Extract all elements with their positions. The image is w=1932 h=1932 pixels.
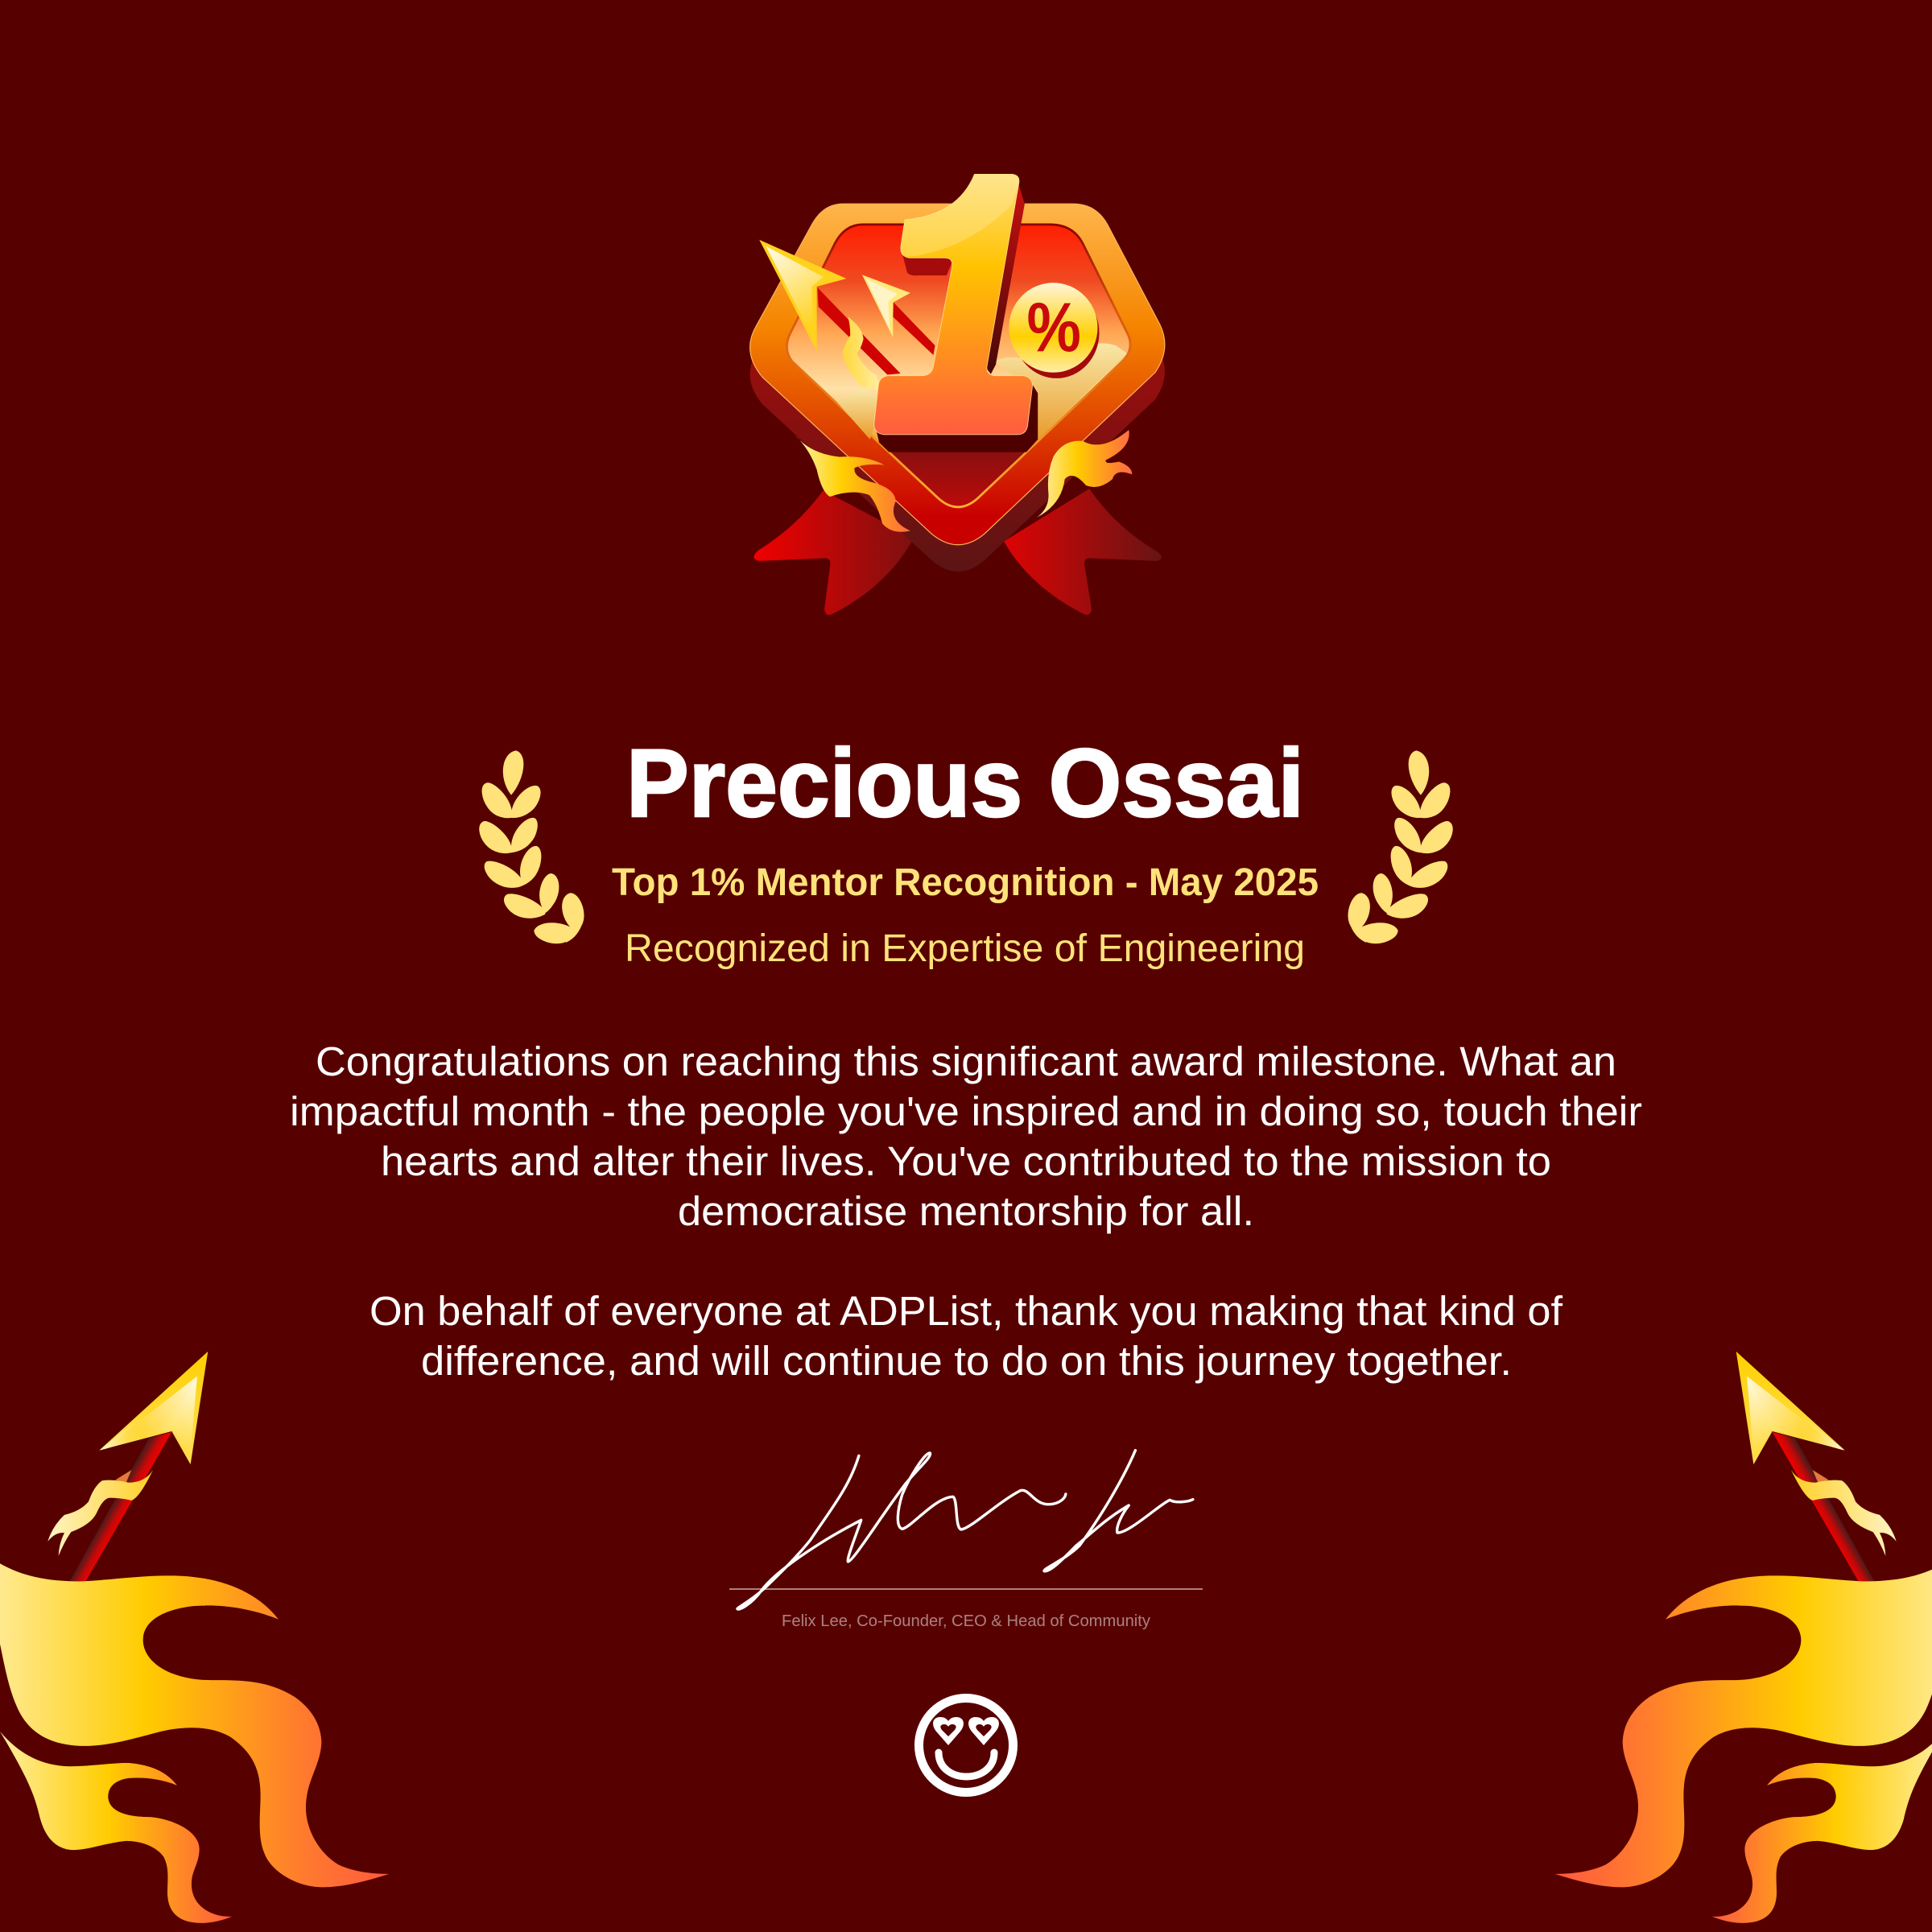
flame right <box>1037 430 1132 518</box>
arrow ribbon <box>1791 1470 1897 1556</box>
arrow shaft accent <box>1813 1470 1829 1483</box>
medal inner panel <box>786 225 1130 507</box>
right flame and arrow <box>1555 1352 1932 1923</box>
arrow shaft accent <box>115 1470 131 1483</box>
title: Precious Ossai <box>626 729 1304 837</box>
main flame <box>1555 1563 1932 1887</box>
large arrow wave <box>842 317 881 390</box>
subtitle: Top 1% Mentor Recognition - May 2025 <box>612 861 1319 904</box>
body message: impactful month - the people you've inspired and in doing so, touch their <box>290 1088 1642 1134</box>
numeral arm shadow <box>902 253 953 275</box>
numeral one <box>874 174 1038 452</box>
arrow head facet one <box>1747 1377 1841 1450</box>
medal depth <box>750 231 1165 572</box>
flame left <box>795 436 910 532</box>
numeral front <box>874 174 1032 435</box>
arrow head <box>1736 1352 1845 1464</box>
body message: Congratulations on reaching this significant award milestone. What an <box>316 1038 1616 1084</box>
arrow head <box>99 1352 208 1464</box>
arrow shaft <box>68 1432 171 1583</box>
percent coin <box>1009 283 1100 378</box>
body message: On behalf of everyone at ADPList, thank you making that kind of <box>369 1288 1563 1334</box>
small arrow head <box>862 275 910 337</box>
arrow shaft <box>1773 1432 1876 1583</box>
arrow head wing highlight <box>100 1409 151 1451</box>
body message <box>290 1038 1642 1384</box>
body message: democratise mentorship for all. <box>678 1188 1254 1234</box>
signature line <box>729 1588 1203 1590</box>
arrow ribbon <box>47 1470 153 1556</box>
body message: hearts and alter their lives. You've contributed to the mission to <box>381 1138 1551 1184</box>
ribbon: left tail <box>754 490 914 615</box>
medal badge <box>750 174 1165 615</box>
percent coin face <box>1009 283 1097 373</box>
percent sign: % <box>1027 289 1081 366</box>
expertise line: Recognized in Expertise of Engineering <box>625 927 1305 970</box>
ribbon: right tail <box>1004 489 1162 615</box>
numeral right side <box>986 184 1025 374</box>
laurel right <box>1348 751 1452 943</box>
arrow head facet two <box>1747 1377 1781 1459</box>
large arrow head <box>759 240 846 351</box>
small arrow <box>862 275 935 355</box>
lower flame <box>1712 1732 1932 1923</box>
arrow head facet one <box>103 1377 197 1450</box>
gold mound right <box>994 344 1127 441</box>
lower flame <box>0 1732 232 1923</box>
numeral base shadow <box>877 384 1038 452</box>
medal frame <box>750 204 1165 545</box>
large arrow facet <box>766 246 824 339</box>
signature <box>737 1451 1193 1609</box>
large arrow <box>759 240 901 390</box>
small arrow facet <box>866 279 898 329</box>
left flame and arrow <box>0 1352 389 1923</box>
arrow head wing highlight <box>1794 1409 1844 1451</box>
icon: heart-eyes smiley <box>919 1699 1013 1792</box>
percent coin shadow <box>1013 287 1100 378</box>
body message: difference, and will continue to do on this journey together. <box>421 1338 1512 1384</box>
signatory caption: Felix Lee, Co-Founder, CEO & Head of Community <box>782 1612 1150 1630</box>
laurel left <box>480 751 584 943</box>
large arrow shaft <box>817 287 901 375</box>
numeral gloss <box>901 175 1019 256</box>
arrow head facet two <box>163 1377 197 1459</box>
main flame <box>0 1563 389 1887</box>
gold mound left <box>835 390 876 440</box>
small arrow shaft <box>893 303 935 355</box>
